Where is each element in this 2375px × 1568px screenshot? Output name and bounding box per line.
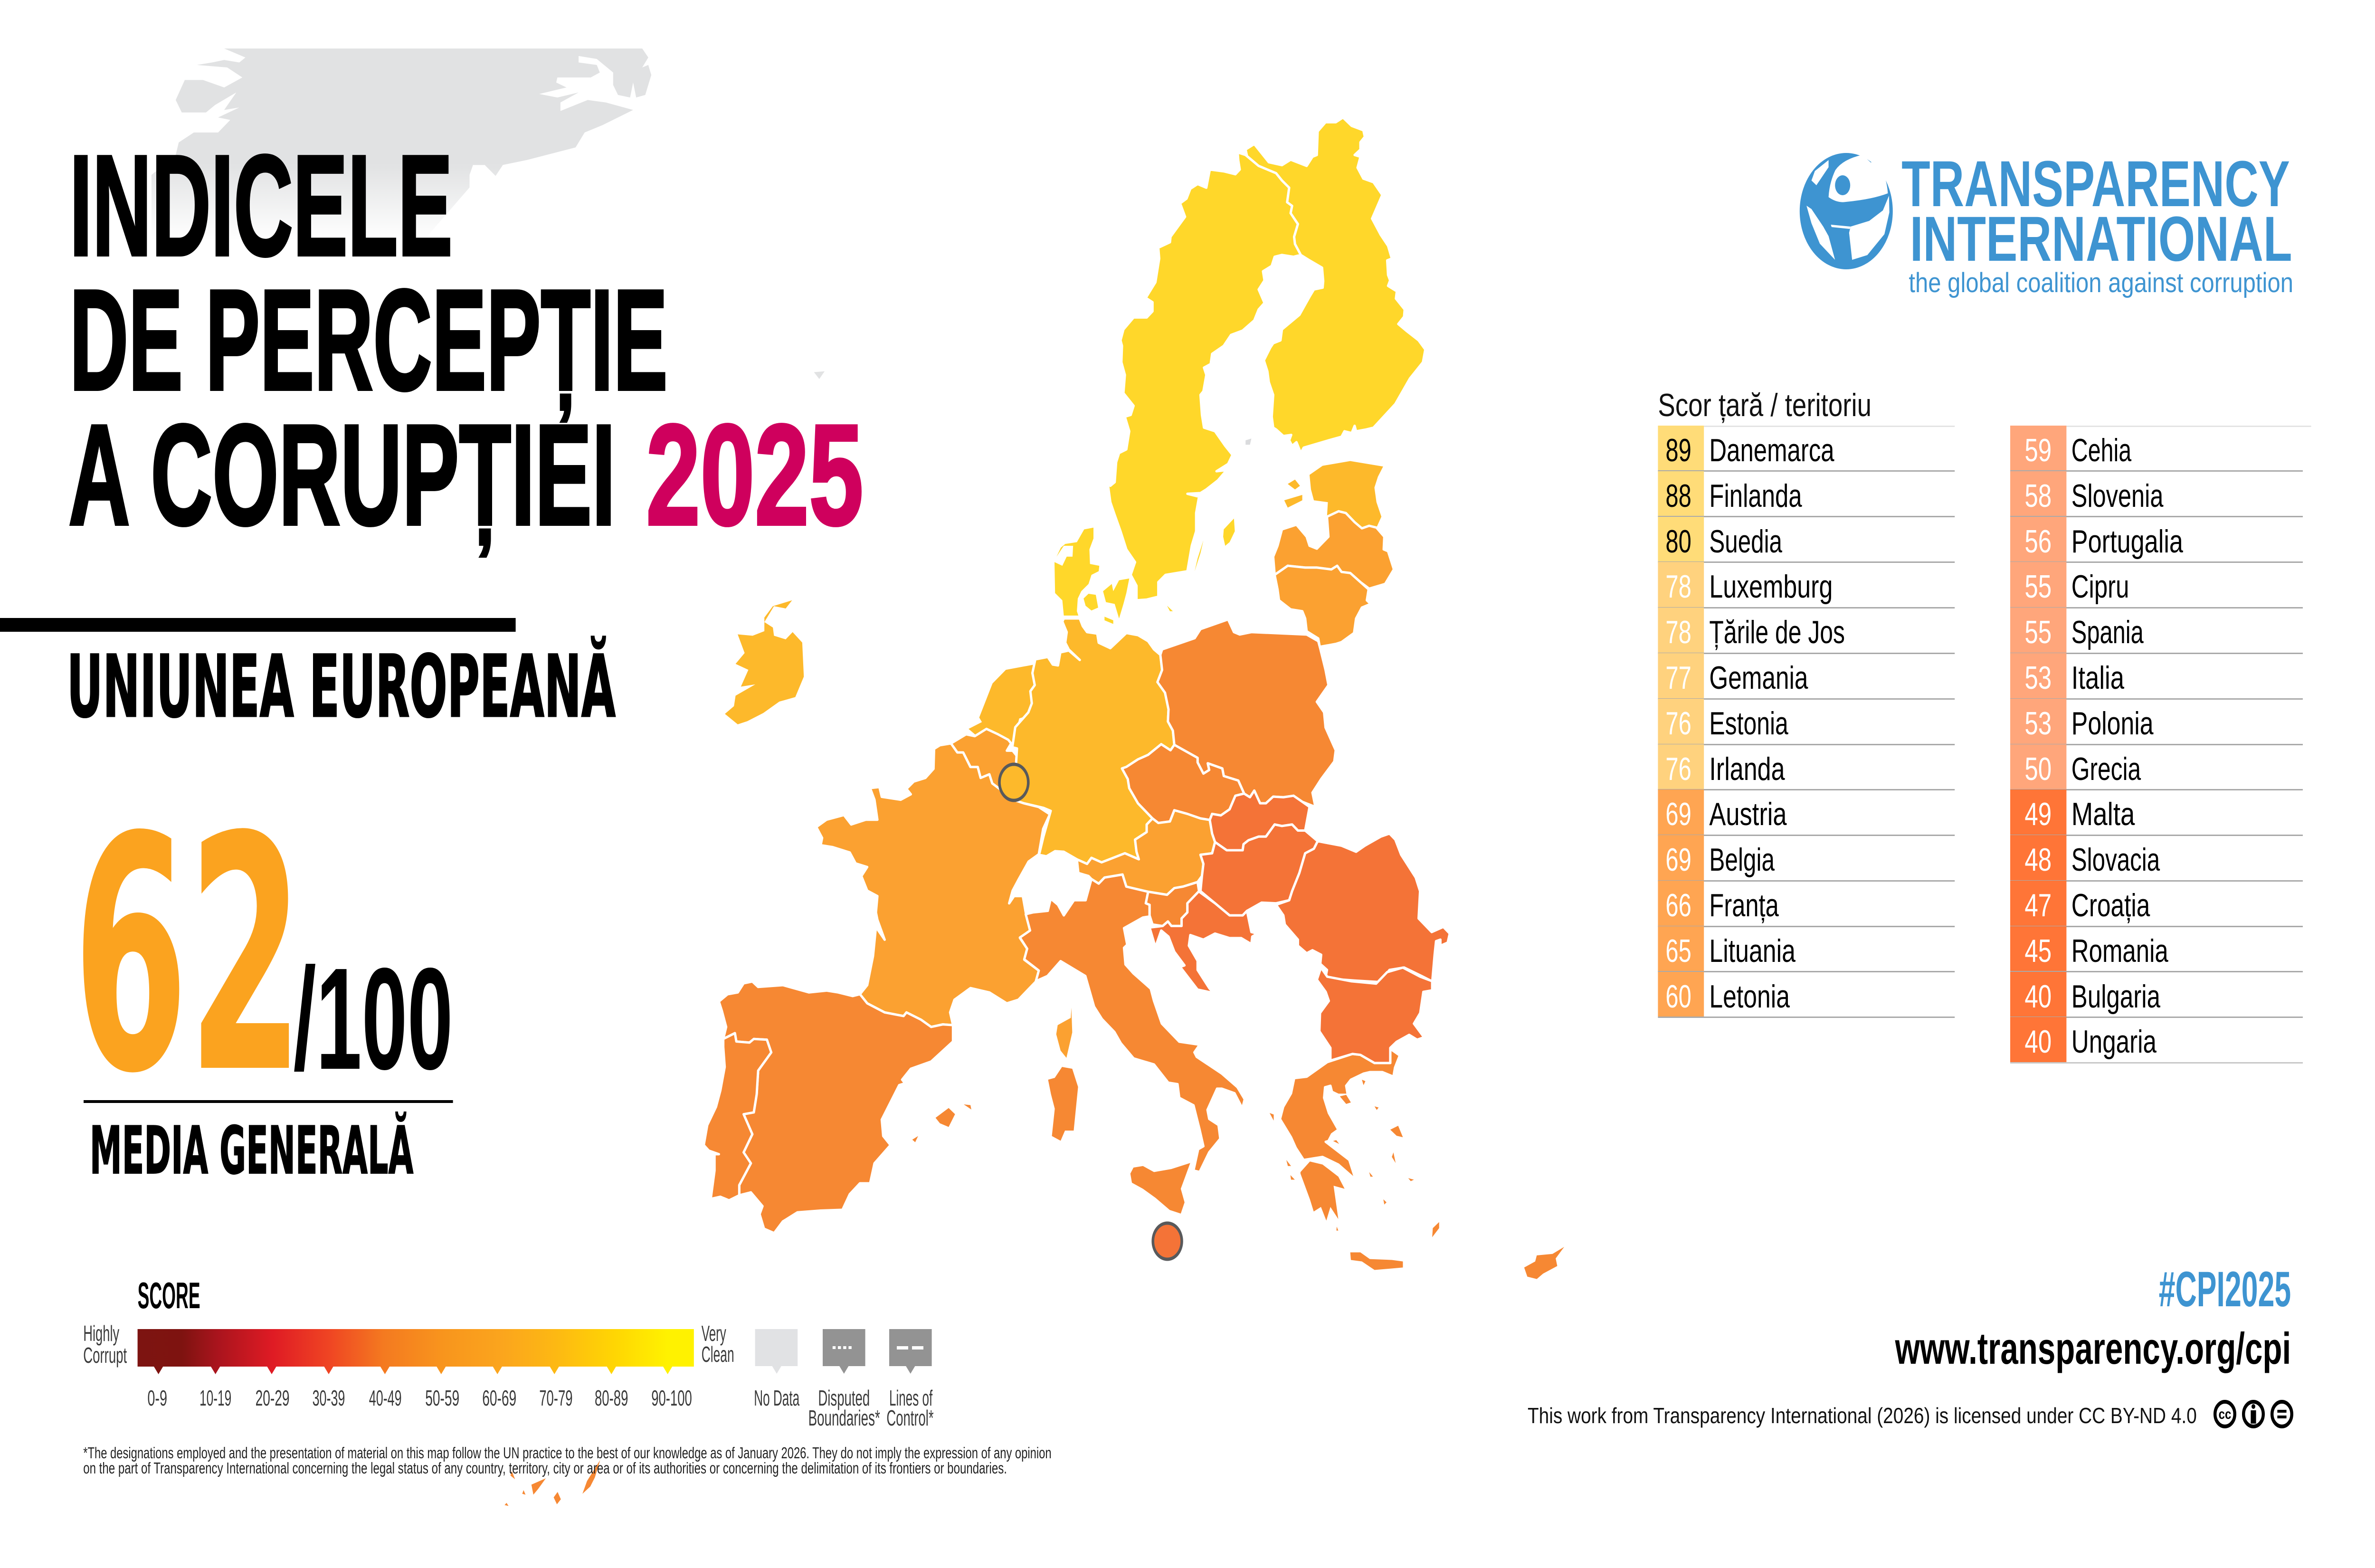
row: Croația: 47 — [2024, 887, 2052, 923]
Finland — [1245, 117, 1425, 453]
legend key: no data — [754, 1329, 800, 1410]
row: Țările de Jos: 78 — [1665, 614, 1691, 650]
average score: 62 — [73, 768, 303, 1144]
row: Polonia: Polonia — [2071, 705, 2154, 741]
row: Lituania: Lituania — [1709, 933, 1796, 969]
title: DE PERCEPȚIE — [69, 259, 668, 423]
score table: column 2 — [2010, 426, 2311, 1064]
marker: Luxembourg — [999, 764, 1028, 800]
scale tick labels: 20-29 — [256, 1386, 290, 1410]
row: Spania: Spania — [2071, 614, 2144, 650]
row: Spania: 55 — [2024, 614, 2052, 650]
gradient scale — [138, 1329, 694, 1367]
row: Portugalia — [2010, 517, 2303, 563]
row: Finlanda: Finlanda — [1709, 478, 1802, 514]
map region: Balkans, Sicily and Cyprus — [1130, 968, 1564, 1279]
scale tick labels: 0-9 — [147, 1386, 167, 1410]
row: Finlanda — [1658, 471, 1955, 517]
Belgium — [951, 729, 1023, 798]
Lithuania — [1274, 566, 1371, 647]
row: Finlanda: 88 — [1665, 478, 1691, 514]
row: Cehia — [2010, 426, 2303, 472]
row: Grecia — [2010, 744, 2303, 790]
scale tick labels: 70-79 — [539, 1386, 573, 1410]
Sweden — [1107, 152, 1301, 600]
row: Danemarca: 89 — [1665, 432, 1691, 468]
row: Belgia — [1658, 835, 1955, 882]
scale tick labels: 10-19 — [200, 1386, 231, 1410]
row: Italia — [2010, 653, 2303, 700]
row: Romania: 45 — [2024, 933, 2052, 969]
Latvia — [1273, 511, 1394, 589]
score table heading: Scor țară / teritoriu — [1658, 387, 1872, 423]
row: Luxemburg: 78 — [1665, 569, 1691, 605]
row: Luxemburg: Luxemburg — [1709, 569, 1833, 605]
Sardinia — [1048, 1067, 1078, 1141]
row: Franța: 66 — [1665, 887, 1691, 923]
legend end label: very clean: Very — [702, 1321, 726, 1346]
logo: Transparency International — [1800, 148, 2293, 298]
legend end label: highly corrupt — [83, 1321, 127, 1368]
title — [68, 125, 864, 558]
row: Suedia: Suedia — [1709, 523, 1783, 560]
row: Austria: 69 — [1665, 796, 1691, 832]
hashtag: #CPI2025 — [2159, 1262, 2291, 1317]
licence text: This work from Transparency International (2026) is licensed under CC BY-ND 4.0 — [1528, 1403, 2197, 1428]
row: Danemarca: Danemarca — [1709, 432, 1834, 468]
Italy — [1020, 874, 1244, 1172]
row: Franța: Franța — [1709, 887, 1779, 923]
row: Letonia: 60 — [1665, 979, 1691, 1015]
legend end label: very clean — [702, 1321, 734, 1367]
row: Cipru: 55 — [2024, 569, 2052, 605]
row: Slovacia: 48 — [2024, 842, 2052, 878]
row: Gemania — [1658, 653, 1955, 700]
row: Grecia: 50 — [2024, 751, 2052, 787]
marker: Malta — [1153, 1223, 1182, 1259]
row: Danemarca — [1658, 426, 1955, 472]
row: Estonia — [1658, 699, 1955, 745]
row: Slovacia: Slovacia — [2071, 842, 2160, 878]
score table: column 1 — [1658, 426, 1955, 1018]
legend key: disputed boundaries — [808, 1329, 880, 1430]
Bulgaria — [1317, 968, 1432, 1063]
scale tick labels: 90-100 — [651, 1386, 692, 1410]
row: Letonia — [1658, 972, 1955, 1018]
legend key: disputed boundaries: Boundaries* — [808, 1406, 880, 1430]
icons: Creative Commons BY-ND: cc — [2219, 1406, 2231, 1422]
map region: Canary Islands — [504, 1460, 600, 1506]
row: Ungaria: 40 — [2024, 1024, 2052, 1060]
website: www.transparency.org/cpi — [1895, 1324, 2291, 1374]
Germany — [1012, 618, 1174, 864]
title: 2025 — [646, 394, 864, 555]
Sicily — [1130, 1163, 1190, 1214]
Austria — [1077, 810, 1215, 895]
row: Croația: Croația — [2071, 887, 2150, 923]
Swedish islands — [1195, 519, 1235, 571]
Spain — [719, 981, 971, 1233]
row: Romania: Romania — [2071, 933, 2168, 969]
row: Italia: 53 — [2024, 660, 2052, 696]
scale ticks — [154, 1367, 672, 1374]
row: Bulgaria: Bulgaria — [2071, 979, 2161, 1015]
row: Slovenia: Slovenia — [2071, 478, 2164, 514]
Slovakia — [1210, 790, 1310, 850]
Slovenia — [1146, 882, 1199, 926]
map region: Ireland, Netherlands and Faroe speck — [725, 371, 1038, 742]
Estonia — [1284, 461, 1383, 528]
row: Lituania — [1658, 926, 1955, 972]
scale tick labels: 50-59 — [425, 1386, 459, 1410]
title: A CORUPȚIEI — [68, 394, 616, 558]
title: INDICELE — [69, 125, 453, 285]
icons: Creative Commons BY-ND — [2215, 1402, 2292, 1426]
row: Franța — [1658, 881, 1955, 927]
tagline: the global coalition against corruption — [1909, 267, 2293, 298]
row: Luxemburg — [1658, 562, 1955, 608]
disclaimer footnote: *The designations employed and the presentation of material on this map follow the UN practice to the best of our knowledge as of January 2026. They do not imply the expression of any opinion — [83, 1444, 1052, 1462]
row: Spania — [2010, 608, 2303, 654]
wordmark: TRANSPARENCY — [1901, 148, 2290, 220]
Denmark — [1054, 528, 1173, 624]
row: Slovenia: 58 — [2024, 478, 2052, 514]
row: Suedia — [1658, 517, 1955, 563]
Romania — [1276, 834, 1450, 982]
row: Slovenia — [2010, 471, 2303, 517]
map region: Nordic and Baltic countries — [1054, 117, 1425, 647]
row: Estonia: 76 — [1665, 705, 1691, 741]
row: Bulgaria: 40 — [2024, 979, 2052, 1015]
Hungary — [1200, 825, 1318, 915]
logo: Transparency International: INTERNATIONAL — [1910, 203, 2292, 275]
row: Portugalia: Portugalia — [2071, 523, 2184, 560]
subtitle: UNIUNEA EUROPEANĂ — [67, 636, 616, 737]
row: Estonia: Estonia — [1709, 705, 1788, 741]
France — [817, 743, 1050, 1027]
row: Gemania: 77 — [1665, 660, 1691, 696]
legend end label: highly corrupt: Corrupt — [83, 1343, 127, 1368]
legend key: lines of control: Lines of — [889, 1386, 932, 1410]
Portugal — [704, 1033, 771, 1200]
row: Romania — [2010, 926, 2303, 972]
row: Țările de Jos: Țările de Jos — [1709, 614, 1845, 650]
Netherlands — [969, 664, 1038, 742]
scale tick labels — [147, 1386, 692, 1410]
scale tick labels: 80-89 — [595, 1386, 628, 1410]
row: Gemania: Gemania — [1709, 660, 1808, 696]
map background: grey Greenland and Iceland — [152, 48, 651, 240]
row: Cehia: 59 — [2024, 432, 2052, 468]
row: Polonia: 53 — [2024, 705, 2052, 741]
legend key: lines of control: Control* — [886, 1406, 934, 1430]
row: Irlanda: 76 — [1665, 751, 1691, 787]
row: Malta: 49 — [2024, 796, 2052, 832]
legend heading: SCORE — [138, 1274, 200, 1316]
legend — [83, 1274, 1052, 1477]
row: Austria: Austria — [1709, 796, 1787, 832]
scale tick labels: 40-49 — [369, 1386, 402, 1410]
legend key: no data: No Data — [754, 1386, 800, 1410]
legend key: disputed boundaries: Disputed — [818, 1386, 870, 1410]
Corsica — [1056, 1007, 1072, 1058]
legend end label: very clean: Clean — [702, 1342, 734, 1367]
row: Polonia — [2010, 699, 2303, 745]
row: Cehia: Cehia — [2071, 432, 2132, 468]
icon: TI globe and figure — [1800, 153, 1893, 269]
Greece — [1270, 1049, 1439, 1270]
row: Irlanda — [1658, 744, 1955, 790]
row: Italia: Italia — [2071, 660, 2125, 696]
row: Țările de Jos — [1658, 608, 1955, 654]
row: Irlanda: Irlanda — [1709, 751, 1785, 787]
row: Malta — [2010, 789, 2303, 836]
row: Cipru: Cipru — [2071, 569, 2129, 605]
heading rule — [0, 618, 516, 632]
row: Belgia: 69 — [1665, 842, 1691, 878]
Croatia — [1150, 891, 1257, 1008]
row: Slovacia — [2010, 835, 2303, 882]
legend key: lines of control — [886, 1329, 934, 1430]
row: Portugalia: 56 — [2024, 523, 2052, 560]
row: Grecia: Grecia — [2071, 751, 2141, 787]
row: Cipru — [2010, 562, 2303, 608]
Aland speck — [1245, 438, 1251, 445]
row: Letonia: Letonia — [1709, 979, 1790, 1015]
map: European Union countries by score — [504, 117, 1564, 1506]
row: Austria — [1658, 789, 1955, 836]
Poland — [1158, 619, 1336, 807]
Czechia — [1122, 744, 1244, 823]
disclaimer footnote: on the part of Transparency International concerning the legal status of any country, territory, city or area or of its authorities or concerning the delimitation of its frontiers or boundaries. — [83, 1460, 1007, 1477]
row: Ungaria: Ungaria — [2071, 1024, 2157, 1060]
row: Croația — [2010, 881, 2303, 927]
map region: western Europe — [704, 729, 1078, 1233]
row: Lituania: 65 — [1665, 933, 1691, 969]
Ireland — [725, 600, 804, 724]
row: Bulgaria — [2010, 972, 2303, 1018]
row: Ungaria — [2010, 1017, 2303, 1064]
average score: MEDIA GENERALĂ — [90, 1112, 414, 1189]
scale tick labels: 60-69 — [482, 1386, 516, 1410]
row: Belgia: Belgia — [1709, 842, 1775, 878]
disclaimer footnote — [83, 1444, 1052, 1477]
average score: /100 — [294, 938, 453, 1100]
map region: central and south-eastern Europe — [1012, 618, 1450, 1172]
row: Suedia: 80 — [1665, 523, 1691, 560]
Cyprus — [1524, 1247, 1564, 1279]
row: Malta: Malta — [2071, 796, 2135, 832]
scale tick labels: 30-39 — [313, 1386, 345, 1410]
legend end label: highly corrupt: Highly — [83, 1321, 119, 1346]
